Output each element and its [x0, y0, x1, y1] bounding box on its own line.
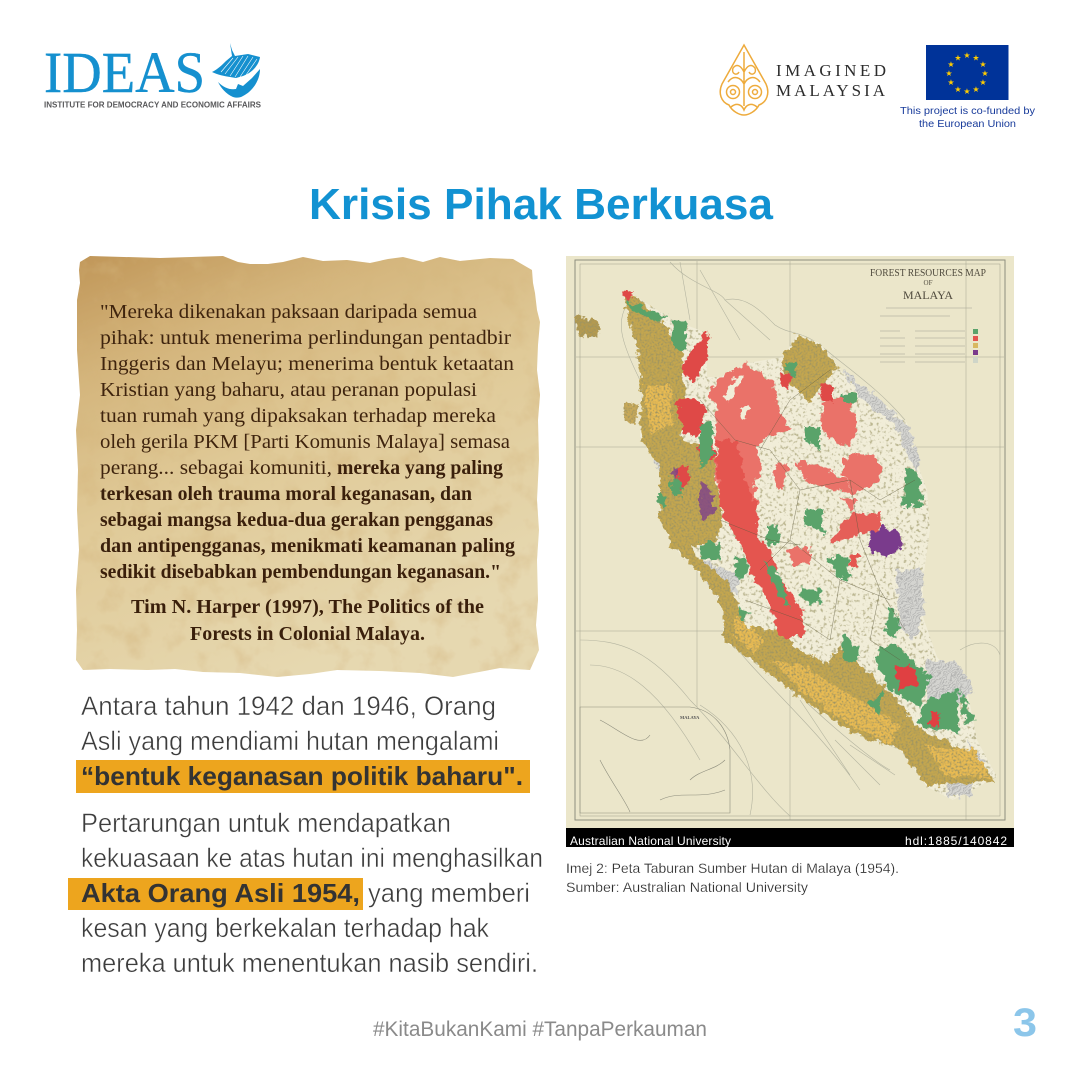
- EU flag: ★: [981, 69, 989, 78]
- quote text: terkesan oleh trauma moral keganasan, dan: [100, 483, 472, 505]
- neighbouring coastlines and shoals: [580, 262, 1000, 816]
- title: Krisis Pihak Berkuasa: [309, 180, 774, 229]
- hashtags: #KitaBukanKami #TanpaPerkauman: [373, 1018, 707, 1041]
- salmon and red forest: [623, 291, 882, 637]
- map frame and grid: [575, 260, 1005, 820]
- EU flag: ★: [954, 54, 962, 62]
- map credit bar: [566, 828, 1014, 848]
- text block: Orang Asli Act: kekuasaan ke atas hutan ini menghasilkan: [81, 843, 543, 873]
- islands: [574, 317, 638, 423]
- quote text: Kristian yang baharu, atau peranan populasi: [100, 379, 477, 401]
- map inset: [580, 707, 730, 813]
- EU flag: ★: [945, 69, 953, 78]
- map credit bar: hdl:1885/140842: [905, 834, 1007, 848]
- map sheet: [566, 256, 1014, 828]
- map legend: [880, 308, 978, 363]
- grey swamp forest: [653, 370, 985, 797]
- quote text: "Mereka dikenakan paksaan daripada semua: [100, 301, 477, 323]
- logo bird icon: [212, 43, 260, 98]
- EU flag: ★: [954, 85, 962, 94]
- EU flag: ★: [963, 51, 971, 60]
- logo: Imagined Malaysia: IMAGINED: [776, 61, 886, 80]
- map credit bar: Australian National University: [570, 834, 731, 848]
- logo: EU flag and funding note: [900, 45, 1036, 130]
- highlight: political violence: “bentuk keganasan politik baharu".: [81, 761, 523, 791]
- quote attribution: Forests in Colonial Malaya.: [190, 623, 425, 645]
- quote attribution: [131, 596, 484, 645]
- text block: Orang Asli Act: [68, 808, 543, 978]
- map title: MALAYA: [903, 288, 953, 302]
- text block: 1942 to 1946: Asli yang mendiami hutan mengalami: [81, 726, 499, 756]
- quote text: oleh gerila PKM [Parti Komunis Malaya] semasa: [100, 431, 510, 453]
- parchment background: [76, 256, 540, 677]
- text block: Orang Asli Act: yang memberi: [368, 878, 530, 908]
- quote text: perang... sebagai komuniti,: [100, 457, 332, 479]
- text block: Orang Asli Act: Pertarungan untuk mendapatkan: [81, 808, 451, 838]
- cream clearings in red: [722, 375, 775, 455]
- quote text: tuan rumah yang dipaksakan terhadap mereka: [100, 405, 496, 427]
- icon: wayang puppet: [720, 45, 768, 115]
- logo: Imagined Malaysia: MALAYSIA: [776, 81, 886, 100]
- map inset: MALAYA: [680, 715, 700, 720]
- EU flag: ★: [979, 60, 987, 69]
- map title: OF: [924, 279, 933, 287]
- EU flag: ★: [972, 54, 980, 62]
- text block: 1942 to 1946: [76, 691, 530, 793]
- panel: parchment quote: [76, 256, 540, 677]
- text block: Orang Asli Act: mereka untuk menentukan nasib sendiri.: [81, 948, 538, 978]
- logo: IDEAS: IDEAS: [44, 40, 205, 105]
- logo: EU flag and funding note: the European Union: [919, 118, 1016, 130]
- land mass: [623, 293, 997, 800]
- quote text: sedikit disebabkan pembendungan keganasan.": [100, 561, 501, 583]
- quote attribution: Tim N. Harper (1997), The Politics of the: [131, 596, 484, 618]
- quote text: mereka yang paling: [337, 457, 503, 479]
- text block: 1942 to 1946: Antara tahun 1942 dan 1946, Orang: [81, 691, 496, 721]
- road network: [700, 370, 915, 660]
- purple patches: [671, 465, 902, 556]
- quote text: dan antipengganas, menikmati keamanan paling: [100, 535, 515, 557]
- EU flag: ★: [947, 78, 955, 87]
- EU flag: ★: [972, 85, 980, 94]
- map title: FOREST RESOURCES MAP: [870, 268, 986, 279]
- EU flag: ★: [947, 60, 955, 69]
- map caption: [566, 860, 899, 895]
- EU flag: [926, 45, 1008, 100]
- panel: forest resources map: [566, 256, 1014, 848]
- logo: EU flag and funding note: This project is co-funded by: [900, 105, 1036, 117]
- green reserved forest: [623, 300, 975, 733]
- map caption: Imej 2: Peta Taburan Sumber Hutan di Malaya (1954).: [566, 860, 899, 876]
- quote text: pihak: untuk menerima perlindungan pentadbir: [100, 327, 511, 349]
- logo: Imagined Malaysia: [720, 45, 886, 115]
- red patches on green: [895, 665, 940, 728]
- text block: Orang Asli Act: kesan yang berkekalan terhadap hak: [81, 913, 489, 943]
- yellow mixed land band: [623, 293, 995, 787]
- quote text: [100, 301, 515, 583]
- quote text: Inggeris dan Melayu; menerima bentuk ketaatan: [100, 353, 514, 375]
- quote text: sebagai mangsa kedua-dua gerakan pengganas: [100, 509, 493, 531]
- page number: 3: [1013, 1001, 1037, 1045]
- highlight: Akta Orang Asli 1954: Akta Orang Asli 1954,: [81, 878, 360, 908]
- EU flag: ★: [979, 78, 987, 87]
- map title: [870, 269, 986, 299]
- map caption: Sumber: Australian National University: [566, 879, 808, 895]
- logo: IDEAS: INSTITUTE FOR DEMOCRACY AND ECONOMIC AFFAIRS: [44, 100, 261, 110]
- EU flag: ★: [963, 87, 971, 96]
